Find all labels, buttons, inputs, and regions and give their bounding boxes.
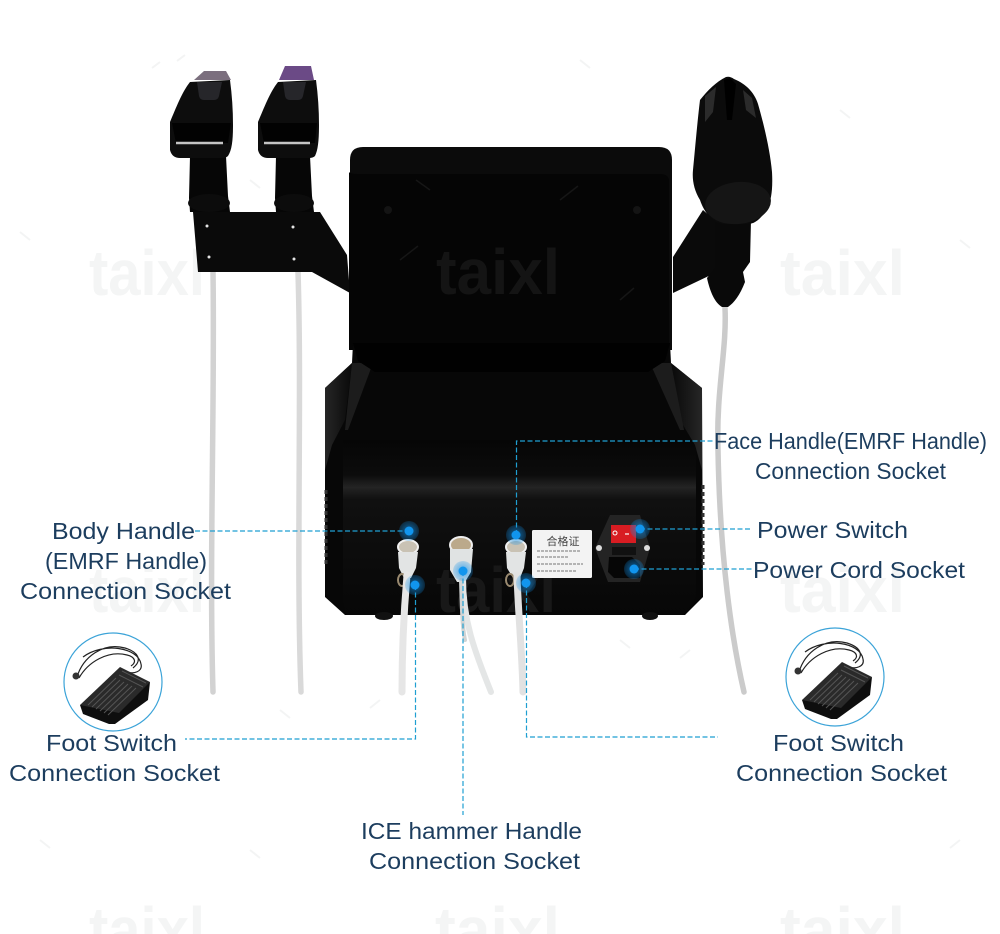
leader: power cord socket — [634, 568, 752, 570]
icon: left foot switch — [64, 633, 162, 731]
icon: right foot switch — [786, 628, 884, 726]
background watermarks: taixl — [780, 554, 905, 626]
connector: body handle — [398, 540, 418, 692]
handle one — [170, 71, 233, 212]
label: ice hammer handle socket: Connection Socket — [369, 848, 580, 874]
background watermarks: taixl — [780, 237, 905, 309]
base unit: taixl — [436, 554, 556, 626]
label: body handle socket: (EMRF Handle) — [45, 548, 207, 574]
background watermarks: taixl — [89, 237, 205, 309]
monitor back panel — [349, 147, 672, 350]
power module — [595, 515, 650, 582]
certificate sticker — [532, 530, 592, 578]
leader: left foot switch socket — [185, 585, 416, 739]
leader: right foot switch socket — [526, 583, 718, 737]
background watermarks: taixl — [89, 554, 205, 626]
label: left foot switch socket: Foot Switch — [46, 730, 177, 756]
label: ice hammer handle socket: ICE hammer Handle — [361, 818, 582, 844]
monitor back panel: taixl — [436, 236, 560, 308]
label: left foot switch socket — [9, 730, 220, 786]
handle two — [258, 66, 319, 212]
leader: body handle socket — [195, 530, 409, 532]
leader: ice hammer socket — [462, 571, 464, 815]
leader: face handle socket — [516, 441, 714, 535]
label: power cord socket: Power Cord Socket — [753, 557, 965, 583]
connector: face handle — [506, 540, 526, 692]
label: body handle socket: Connection Socket — [20, 578, 231, 604]
cable: left body handle — [212, 272, 213, 692]
label: face handle socket — [714, 428, 987, 484]
right handle bracket — [673, 210, 720, 293]
label: right foot switch socket: Foot Switch — [773, 730, 904, 756]
callout dots — [399, 519, 650, 595]
connector: ice hammer handle — [450, 537, 491, 692]
label: right foot switch socket: Connection Socket — [736, 760, 947, 786]
leader: power switch — [640, 528, 751, 530]
label: power switch: Power Switch — [757, 517, 908, 543]
label: right foot switch socket — [736, 730, 947, 786]
label: face handle socket: Connection Socket — [755, 458, 946, 484]
certificate sticker: 合格证 — [546, 534, 580, 548]
label: body handle socket — [20, 518, 231, 604]
left handle bracket — [193, 212, 350, 293]
bracket screws — [206, 224, 296, 260]
label: ice hammer handle socket — [361, 818, 582, 874]
label: left foot switch socket: Connection Socket — [9, 760, 220, 786]
cable: second body handle — [298, 272, 301, 692]
face handle — [693, 77, 773, 307]
base unit — [325, 343, 703, 626]
cable: face handle — [718, 308, 744, 692]
label: body handle socket: Body Handle — [52, 518, 195, 544]
